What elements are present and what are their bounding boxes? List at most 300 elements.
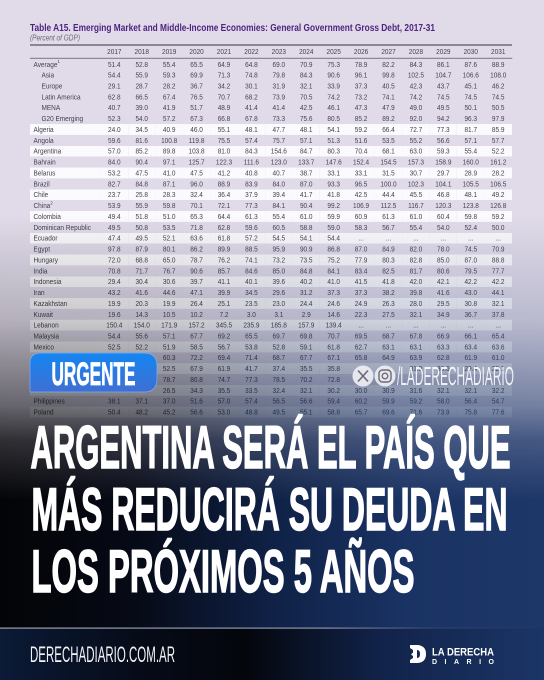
regional average rows and country rows: 77.3: [245, 201, 258, 210]
regional average rows and country rows: 59.0: [327, 223, 340, 232]
regional average rows and country rows: 53.9: [108, 201, 121, 210]
regional average rows and country rows: 37.9: [245, 190, 258, 199]
regional average rows and country rows: 51.0: [163, 212, 175, 221]
regional average rows and country rows: Egypt: [34, 245, 50, 254]
regional average rows and country rows: 57.0: [108, 147, 121, 156]
regional average rows and country rows: MENA: [41, 103, 60, 112]
regional average rows and country rows: 75.6: [300, 114, 313, 123]
regional average rows and country rows: 66.4: [382, 125, 395, 134]
regional average rows and country rows: 95.9: [273, 245, 285, 254]
regional average rows and country rows: 57.4: [245, 397, 258, 406]
regional average rows and country rows: 34.5: [245, 288, 258, 297]
regional average rows and country rows: 59.9: [382, 397, 395, 406]
regional average rows and country rows: 152.4: [353, 158, 369, 167]
regional average rows and country rows: 88.8: [492, 256, 505, 264]
regional average rows and country rows: 19.6: [108, 310, 121, 319]
regional average rows and country rows: ...: [441, 321, 446, 330]
regional average rows and country rows: 70.8: [108, 266, 121, 275]
regional average rows and country rows: 31.5: [382, 169, 395, 178]
regional average rows and country rows: 68.8: [135, 256, 148, 264]
regional average rows and country rows: 90.4: [300, 201, 313, 210]
regional average rows and country rows: 120.3: [435, 201, 451, 210]
headline: [30, 414, 510, 605]
regional average rows and country rows: 37.8: [492, 310, 505, 319]
regional average rows and country rows: Mexico: [34, 343, 54, 351]
regional average rows and country rows: 85.2: [355, 114, 367, 123]
regional average rows and country rows: 59.4: [327, 397, 340, 406]
regional average rows and country rows: 70.9: [300, 60, 313, 69]
regional average rows and country rows: 90.9: [300, 245, 313, 254]
regional average rows and country rows: 55.4: [464, 147, 477, 156]
regional average rows and country rows: 23.0: [273, 299, 285, 308]
regional average rows and country rows: 58.5: [190, 343, 203, 351]
regional average rows and country rows: 45.5: [410, 190, 422, 199]
regional average rows and country rows: 28.3: [163, 190, 175, 199]
regional average rows and country rows: 150.4: [106, 321, 122, 330]
regional average rows and country rows: 20.3: [135, 299, 148, 308]
regional average rows and country rows: 32.1: [492, 299, 505, 308]
regional average rows and country rows: 30.9: [382, 386, 395, 395]
year header row: 2021: [217, 47, 231, 56]
regional average rows and country rows: 57.1: [163, 332, 175, 341]
regional average rows and country rows: 7.2: [219, 310, 228, 319]
regional average rows and country rows: 76.2: [218, 256, 230, 264]
regional average rows and country rows: 39.4: [273, 190, 285, 199]
regional average rows and country rows: 37.0: [163, 397, 175, 406]
regional average rows and country rows: 54.7: [492, 397, 505, 406]
regional average rows and country rows: 41.4: [245, 103, 258, 112]
regional average rows and country rows: 59.9: [327, 212, 340, 221]
regional average rows and country rows: 102.3: [408, 180, 424, 188]
year header row: 2023: [272, 47, 286, 56]
regional average rows and country rows: 76.5: [190, 93, 203, 101]
regional average rows and country rows: 59.2: [410, 397, 422, 406]
regional average rows and country rows: 125.7: [188, 158, 205, 167]
regional average rows and country rows: 42.2: [492, 277, 505, 286]
year header row: 2025: [326, 47, 341, 56]
regional average rows and country rows: 71.6: [410, 408, 422, 417]
regional average rows and country rows: 24.9: [355, 299, 367, 308]
regional average rows and country rows: 49.5: [437, 103, 450, 112]
regional average rows and country rows: 44.1: [492, 288, 505, 297]
regional average rows and country rows: 73.9: [437, 408, 450, 417]
regional average rows and country rows: 56.7: [382, 223, 395, 232]
regional average rows and country rows: 123.8: [463, 201, 479, 210]
regional average rows and country rows: 54.1: [300, 234, 313, 243]
regional average rows and country rows: 88.9: [218, 180, 230, 188]
regional average rows and country rows: 76.7: [163, 266, 175, 275]
regional average rows and country rows: ...: [386, 321, 391, 330]
regional average rows and country rows: 78.7: [163, 375, 175, 384]
regional average rows and country rows: 66.1: [464, 332, 477, 341]
regional average rows and country rows: 38.7: [300, 169, 313, 178]
regional average rows and country rows: 83.9: [245, 180, 258, 188]
regional average rows and country rows: 108.0: [490, 71, 506, 80]
regional average rows and country rows: 126.8: [490, 201, 506, 210]
regional average rows and country rows: 72.8: [327, 375, 340, 384]
regional average rows and country rows: 37.3: [355, 288, 367, 297]
regional average rows and country rows: 48.1: [300, 125, 313, 134]
regional average rows and country rows: 59.6: [108, 136, 121, 145]
regional average rows and country rows: 32.1: [410, 310, 422, 319]
regional average rows and country rows: 35.5: [218, 386, 230, 395]
year header row: 2026: [354, 47, 368, 56]
regional average rows and country rows: Chile: [34, 190, 48, 199]
footer band: [0, 628, 544, 680]
regional average rows and country rows: 14.3: [135, 310, 148, 319]
regional average rows and country rows: 44.4: [382, 190, 395, 199]
regional average rows and country rows: 28.0: [410, 299, 422, 308]
website url: DERECHADIARIO.COM.AR: [30, 642, 175, 667]
regional average rows and country rows: 46.2: [492, 82, 505, 91]
icon: X: [352, 366, 374, 386]
regional average rows and country rows: Lebanon: [34, 321, 59, 330]
regional average rows and country rows: 49.0: [410, 103, 422, 112]
regional average rows and country rows: 44.6: [163, 288, 175, 297]
regional average rows and country rows: 93.3: [327, 180, 340, 188]
regional average rows and country rows: 52.5: [163, 364, 175, 373]
regional average rows and country rows: Poland: [34, 408, 54, 417]
regional average rows and country rows: 31.9: [410, 364, 422, 373]
regional average rows and country rows: 67.3: [190, 114, 203, 123]
regional average rows and country rows: 42.3: [410, 82, 422, 91]
regional average rows and country rows: 73.2: [355, 93, 367, 101]
regional average rows and country rows: 50.1: [464, 103, 477, 112]
regional average rows and country rows: 49.2: [492, 190, 505, 199]
regional average rows and country rows: 56.6: [300, 397, 313, 406]
regional average rows and country rows: 33.9: [327, 82, 340, 91]
regional average rows and country rows: 65.3: [190, 212, 203, 221]
regional average rows and country rows: 57.0: [218, 397, 230, 406]
regional average rows and country rows: 77.6: [492, 408, 505, 417]
year header row: 2028: [409, 47, 423, 56]
regional average rows and country rows: 64.4: [218, 212, 230, 221]
regional average rows and country rows: 51.3: [327, 136, 340, 145]
regional average rows and country rows: 39.7: [190, 277, 203, 286]
regional average rows and country rows: 51.8: [135, 212, 148, 221]
regional average rows and country rows: 42.5: [300, 103, 313, 112]
regional average rows and country rows: 58.8: [327, 408, 340, 417]
regional average rows and country rows: 79.5: [464, 266, 477, 275]
regional average rows and country rows: 55.4: [273, 212, 285, 221]
regional average rows and country rows: 52.2: [135, 343, 148, 351]
regional average rows and country rows: 96.5: [355, 180, 367, 188]
regional average rows and country rows: 64.9: [218, 60, 230, 69]
regional average rows and country rows: 158.9: [435, 158, 451, 167]
regional average rows and country rows: 57.1: [300, 136, 313, 145]
regional average rows and country rows: 28.2: [163, 82, 175, 91]
regional average rows and country rows: 97.9: [492, 114, 505, 123]
regional average rows and country rows: 74.5: [464, 93, 477, 101]
regional average rows and country rows: 75.3: [327, 60, 340, 69]
regional average rows and country rows: 235.9: [243, 321, 259, 330]
regional average rows and country rows: 43.0: [464, 288, 477, 297]
regional average rows and country rows: Colombia: [34, 212, 61, 221]
regional average rows and country rows: 345.5: [216, 321, 232, 330]
regional average rows and country rows: 42.2: [464, 277, 477, 286]
regional average rows and country rows: 112.5: [381, 201, 396, 210]
regional average rows and country rows: 39.9: [218, 288, 230, 297]
regional average rows and country rows: 61.3: [245, 212, 258, 221]
regional average rows and country rows: 74.1: [245, 256, 258, 264]
regional average rows and country rows: 30.0: [355, 386, 367, 395]
regional average rows and country rows: 96.0: [190, 180, 203, 188]
regional average rows and country rows: 50.8: [135, 223, 148, 232]
regional average rows and country rows: 54.5: [273, 234, 285, 243]
regional average rows and country rows: 61.8: [327, 343, 340, 351]
brand logo: DIARIO: [432, 659, 495, 666]
regional average rows and country rows: 57.4: [245, 136, 258, 145]
regional average rows and country rows: 29.4: [464, 364, 477, 373]
brand logo: [410, 645, 495, 666]
regional average rows and country rows: 87.0: [464, 256, 477, 264]
regional average rows and country rows: Algeria: [34, 125, 54, 134]
regional average rows and country rows: India: [34, 266, 48, 275]
regional average rows and country rows: Belarus: [34, 169, 55, 178]
regional average rows and country rows: 32.1: [300, 386, 313, 395]
regional average rows and country rows: 29.6: [273, 288, 285, 297]
regional average rows and country rows: 82.0: [410, 245, 422, 254]
regional average rows and country rows: 53.8: [245, 343, 258, 351]
regional average rows and country rows: 42.0: [410, 277, 422, 286]
regional average rows and country rows: 69.6: [382, 408, 395, 417]
regional average rows and country rows: 60.5: [273, 223, 285, 232]
regional average rows and country rows: 41.7: [300, 190, 313, 199]
regional average rows and country rows: 48.1: [464, 190, 477, 199]
regional average rows and country rows: 27.5: [382, 310, 395, 319]
regional average rows and country rows: 103.8: [188, 147, 205, 156]
regional average rows and country rows: 80.6: [437, 266, 450, 275]
regional average rows and country rows: 171.9: [161, 321, 177, 330]
regional average rows and country rows: 84.0: [108, 158, 121, 167]
regional average rows and country rows: 56.6: [190, 408, 203, 417]
regional average rows and country rows: 33.5: [245, 386, 258, 395]
regional average rows and country rows: 65.5: [245, 332, 258, 341]
regional average rows and country rows: 47.1: [190, 288, 203, 297]
regional average rows and country rows: 65.7: [355, 408, 367, 417]
regional average rows and country rows: 63.0: [410, 147, 422, 156]
regional average rows and country rows: 75.5: [218, 136, 230, 145]
regional average rows and country rows: 133.7: [298, 158, 314, 167]
regional average rows and country rows: 32.4: [273, 386, 285, 395]
regional average rows and country rows: 50.5: [492, 103, 505, 112]
regional average rows and country rows: 52.1: [163, 234, 175, 243]
regional average rows and country rows: 39.8: [410, 288, 422, 297]
regional average rows and country rows: 84.8: [135, 180, 148, 188]
regional average rows and country rows: 69.7: [273, 332, 285, 341]
regional average rows and country rows: 84.1: [273, 201, 285, 210]
social handle watermark: [352, 361, 514, 391]
regional average rows and country rows: 86.1: [437, 60, 450, 69]
regional average rows and country rows: 62.8: [437, 353, 450, 362]
regional average rows and country rows: 57.2: [245, 234, 258, 243]
regional average rows and country rows: 36.4: [218, 190, 230, 199]
regional average rows and country rows: 87.6: [464, 60, 477, 69]
regional average rows and country rows: 58.3: [355, 223, 367, 232]
regional average rows and country rows: 147.6: [326, 158, 342, 167]
year header row: 2018: [135, 47, 149, 56]
regional average rows and country rows: 35.8: [327, 364, 340, 373]
regional average rows and country rows: 54.4: [108, 332, 121, 341]
regional average rows and country rows: 64.9: [382, 353, 395, 362]
regional average rows and country rows: 154.6: [271, 147, 287, 156]
regional average rows and country rows: 70.1: [190, 201, 203, 210]
regional average rows and country rows: 86.2: [190, 245, 203, 254]
regional average rows and country rows: 75.2: [327, 256, 340, 264]
regional average rows and country rows: 41.7: [245, 364, 258, 373]
regional average rows and country rows: 32.4: [190, 190, 203, 199]
regional average rows and country rows: 87.9: [135, 245, 148, 254]
regional average rows and country rows: 69.8: [300, 332, 313, 341]
regional average rows and country rows: 161.2: [490, 158, 506, 167]
regional average rows and country rows: 111.6: [244, 158, 259, 167]
icon: logo D: [410, 645, 426, 663]
regional average rows and country rows: 160.0: [463, 158, 479, 167]
regional average rows and country rows: 84.0: [273, 180, 285, 188]
regional average rows and country rows: 34.2: [218, 82, 230, 91]
regional average rows and country rows: 66.8: [218, 114, 230, 123]
regional average rows and country rows: 60.3: [163, 353, 175, 362]
regional average rows and country rows: 32.2: [492, 386, 505, 395]
regional average rows and country rows: 66.9: [437, 332, 450, 341]
regional average rows and country rows: 105.5: [463, 180, 479, 188]
regional average rows and country rows: 68.1: [382, 147, 395, 156]
regional average rows and country rows: 80.1: [163, 245, 175, 254]
regional average rows and country rows: 185.8: [271, 321, 287, 330]
regional average rows and country rows: 79.8: [273, 71, 285, 80]
regional average rows and country rows: 81.6: [135, 136, 148, 145]
regional average rows and country rows: 36.7: [464, 310, 477, 319]
year header row: 2020: [189, 47, 204, 56]
regional average rows and country rows: 40.7: [108, 103, 121, 112]
regional average rows and country rows: 80.3: [327, 147, 340, 156]
regional average rows and country rows: 83.4: [355, 266, 367, 275]
regional average rows and country rows: 55.1: [300, 408, 313, 417]
regional average rows and country rows: 26.3: [382, 299, 395, 308]
regional average rows and country rows: 67.8: [245, 114, 258, 123]
regional average rows and country rows: 51.9: [163, 343, 175, 351]
regional average rows and country rows: 71.4: [245, 353, 258, 362]
regional average rows and country rows: 68.7: [382, 332, 395, 341]
regional average rows and country rows: 14.6: [327, 310, 340, 319]
regional average rows and country rows: ...: [386, 234, 391, 243]
wordmark: LA DERECHA: [432, 646, 494, 658]
regional average rows and country rows: 46.8: [437, 190, 450, 199]
regional average rows and country rows: 28.7: [135, 82, 148, 91]
regional average rows and country rows: 29.4: [108, 277, 121, 286]
year header row: 2029: [436, 47, 451, 56]
regional average rows and country rows: 96.1: [355, 71, 367, 80]
regional average rows and country rows: 42.1: [437, 277, 450, 286]
regional average rows and country rows: 69.9: [190, 71, 203, 80]
regional average rows and country rows: 61.9: [218, 364, 230, 373]
regional average rows and country rows: 80.8: [190, 375, 203, 384]
regional average rows and country rows: Bahrain: [34, 158, 56, 167]
regional average rows and country rows: 70.7: [327, 332, 340, 341]
regional average rows and country rows: 37.4: [273, 364, 285, 373]
year header row: 2017: [107, 47, 122, 56]
regional average rows and country rows: 31.2: [300, 288, 313, 297]
regional average rows and country rows: 106.6: [463, 71, 479, 80]
regional average rows and country rows: 157.9: [298, 321, 314, 330]
regional average rows and country rows: 10.5: [163, 310, 175, 319]
regional average rows and country rows: 84.1: [327, 266, 340, 275]
regional average rows and country rows: 29.1: [108, 82, 121, 91]
regional average rows and country rows: 41.9: [163, 103, 175, 112]
subtitle: (Percent of GDP): [30, 34, 80, 42]
regional average rows and country rows: 81.7: [410, 266, 422, 275]
regional average rows and country rows: 59.3: [163, 71, 175, 80]
regional average rows and country rows: 3.0: [247, 310, 256, 319]
regional average rows and country rows: 85.0: [273, 266, 285, 275]
regional average rows and country rows: 69.4: [218, 353, 230, 362]
regional average rows and country rows: 36.7: [190, 82, 203, 91]
regional average rows and country rows: ...: [468, 321, 473, 330]
regional average rows and country rows: 19.9: [108, 299, 121, 308]
regional average rows and country rows: 35.5: [300, 364, 313, 373]
regional average rows and country rows: 41.0: [327, 277, 340, 286]
regional average rows and country rows: 47.5: [190, 169, 203, 178]
regional average rows and country rows: 49.5: [273, 408, 285, 417]
regional average rows and country rows: 66.5: [135, 93, 148, 101]
regional average rows and country rows: 33.1: [355, 169, 367, 178]
regional average rows and country rows: 54.4: [108, 71, 121, 80]
regional average rows and country rows: 88.9: [492, 60, 505, 69]
regional average rows and country rows: 81.0: [218, 147, 230, 156]
regional average rows and country rows: 78.9: [355, 60, 367, 69]
regional average rows and country rows: Ecuador: [34, 234, 58, 243]
regional average rows and country rows: 63.6: [190, 234, 203, 243]
regional average rows and country rows: 40.5: [382, 82, 395, 91]
regional average rows and country rows: 77.3: [437, 125, 450, 134]
regional average rows and country rows: 74.1: [382, 93, 395, 101]
regional average rows and country rows: 49.5: [108, 223, 121, 232]
regional average rows and country rows: 74.5: [464, 245, 477, 254]
regional average rows and country rows: 90.4: [135, 158, 148, 167]
regional average rows and country rows: 55.9: [135, 71, 148, 80]
regional average rows and country rows: 43.7: [437, 82, 450, 91]
regional average rows and country rows: 78.5: [273, 375, 285, 384]
regional average rows and country rows: 86.8: [327, 245, 340, 254]
regional average rows and country rows: 67.1: [327, 353, 340, 362]
regional average rows and country rows: 84.7: [300, 147, 313, 156]
regional average rows and country rows: 68.7: [273, 353, 285, 362]
regional average rows and country rows: 29.1: [492, 364, 505, 373]
regional average rows and country rows: 100.0: [380, 180, 397, 188]
regional average rows and country rows: 59.1: [300, 343, 313, 351]
regional average rows and country rows: 40.8: [245, 169, 258, 178]
regional average rows and country rows: 72.7: [410, 125, 422, 134]
regional average rows and country rows: 54.0: [135, 114, 148, 123]
regional average rows and country rows: 24.4: [300, 299, 313, 308]
regional average rows and country rows: 63.1: [410, 343, 422, 351]
regional average rows and country rows: 90.6: [190, 266, 203, 275]
regional average rows and country rows: 28.2: [492, 169, 505, 178]
regional average rows and country rows: 41.6: [437, 288, 450, 297]
regional average rows and country rows: 74.2: [327, 93, 340, 101]
regional average rows and country rows: 84.9: [382, 245, 395, 254]
regional average rows and country rows: China2: [34, 201, 53, 210]
regional average rows and country rows: 75.7: [273, 136, 285, 145]
year header row: 2019: [162, 47, 176, 56]
regional average rows and country rows: 58.0: [437, 397, 450, 406]
regional average rows and country rows: 89.2: [382, 114, 395, 123]
regional average rows and country rows: 71.3: [218, 71, 230, 80]
regional average rows and country rows: 61.0: [492, 353, 505, 362]
regional average rows and country rows: 55.6: [135, 332, 148, 341]
regional average rows and country rows: 82.7: [108, 180, 121, 188]
regional average rows and country rows: 59.8: [163, 201, 175, 210]
